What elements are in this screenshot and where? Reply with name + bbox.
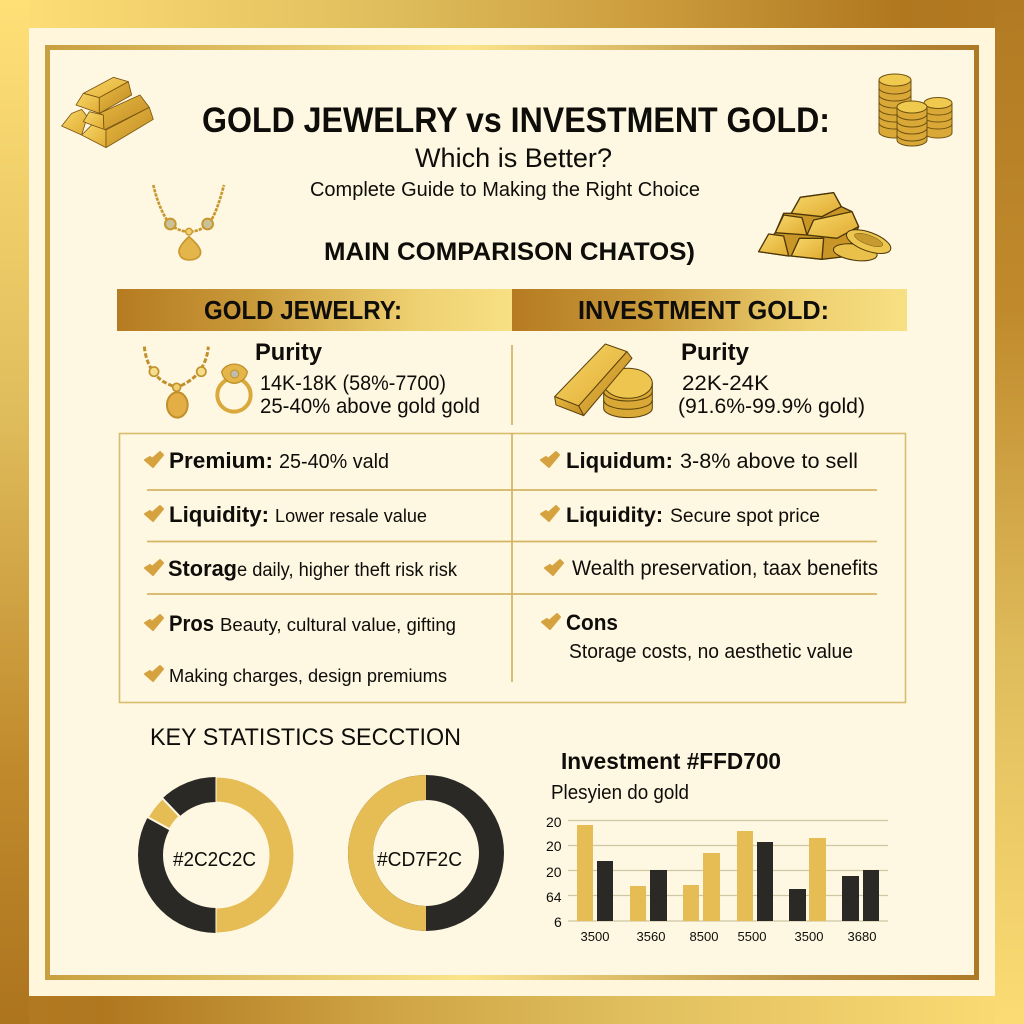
x axis labels: 5500 — [738, 929, 766, 944]
y axis labels: 64 — [546, 889, 562, 905]
row: investment wealth preservation: Wealth preservation, taax benefits — [572, 557, 878, 580]
text block: investment purity — [678, 339, 865, 418]
row: investment cons: Cons — [566, 610, 618, 635]
row: jewelry premium — [145, 448, 389, 473]
row: investment liquidum — [541, 448, 858, 473]
panel: comparison table — [120, 345, 906, 702]
panel: investment gold header — [512, 289, 907, 331]
text block: jewelry purity — [255, 339, 480, 418]
row: jewelry pros: Pros — [169, 611, 214, 636]
main title: GOLD JEWELRY vs INVESTMENT GOLD: — [202, 101, 830, 140]
y axis labels — [546, 814, 562, 930]
panel: investment gold header: INVESTMENT GOLD: — [578, 295, 829, 325]
x axis labels: 3500 — [795, 929, 823, 944]
row: investment liquidum: Liquidum: — [566, 448, 673, 473]
row: jewelry premium: 25-40% vald — [279, 451, 389, 473]
icon: gold bar and coins — [555, 344, 652, 418]
icon: stacked gold bars top left — [62, 77, 153, 148]
row: investment cons — [542, 610, 853, 663]
row: jewelry storage — [145, 556, 457, 581]
bar chart: investment — [546, 748, 888, 944]
row: jewelry storage: e daily, higher theft risk risk — [237, 560, 457, 581]
text block: investment purity: (91.6%-99.9% gold) — [678, 395, 865, 418]
y axis labels: 20 — [546, 864, 562, 880]
icon: coin stacks top right — [879, 74, 952, 146]
y axis labels: 6 — [554, 914, 562, 930]
panel: gold jewelry header — [117, 289, 512, 331]
bars — [577, 825, 879, 921]
chart subtitle: Plesyien do gold — [551, 782, 689, 804]
x axis labels: 3680 — [848, 929, 876, 944]
row: investment liquidity: Liquidity: — [566, 504, 663, 527]
section heading: main comparison: MAIN COMPARISON CHATOS) — [324, 238, 695, 266]
y axis labels: 20 — [546, 838, 562, 854]
donut chart: left — [148, 777, 294, 933]
row: jewelry premium: Premium: — [169, 448, 273, 473]
x axis labels — [581, 929, 876, 944]
row: investment liquidity: Secure spot price — [670, 506, 820, 527]
row: jewelry liquidity: Lower resale value — [275, 506, 427, 526]
x axis labels: 3500 — [581, 929, 609, 944]
row: jewelry storage: Storag — [168, 556, 237, 581]
row: jewelry liquidity: Liquidity: — [169, 502, 269, 527]
row: jewelry pros — [145, 611, 456, 636]
text block: investment purity: Purity — [681, 339, 750, 366]
text block: investment purity: 22K-24K — [682, 372, 769, 395]
x axis labels: 3560 — [637, 929, 665, 944]
icon: necklace and ring — [144, 347, 251, 418]
row: jewelry making charges: Making charges, design premiums — [169, 666, 447, 686]
panel: gold jewelry header: GOLD JEWELRY: — [204, 295, 402, 325]
y axis labels: 20 — [546, 814, 562, 830]
text block: jewelry purity: 14K-18K (58%-7700) — [260, 372, 446, 395]
icon: gold bars and coins pile — [759, 193, 894, 263]
section heading: key statistics: KEY STATISTICS SECCTION — [150, 724, 461, 751]
subtitle: Which is Better? — [415, 143, 612, 173]
row: investment liquidum: 3-8% above to sell — [680, 450, 858, 473]
row: investment cons: Storage costs, no aesthetic value — [569, 641, 853, 663]
x axis labels: 8500 — [690, 929, 718, 944]
chart title: Investment #FFD700 — [561, 748, 781, 774]
donut chart: right — [348, 775, 492, 931]
row: investment liquidity — [541, 504, 820, 527]
icon: necklace top — [153, 185, 224, 260]
text block: jewelry purity: 25-40% above gold gold — [260, 395, 480, 418]
row: jewelry pros: Beauty, cultural value, gifting — [220, 615, 456, 635]
donut chart: left: #2C2C2C — [173, 849, 256, 871]
text block: jewelry purity: Purity — [255, 339, 323, 366]
tagline: Complete Guide to Making the Right Choice — [310, 179, 700, 201]
donut chart: right: #CD7F2C — [377, 849, 462, 871]
title block — [202, 101, 830, 266]
row: jewelry liquidity — [145, 502, 427, 527]
